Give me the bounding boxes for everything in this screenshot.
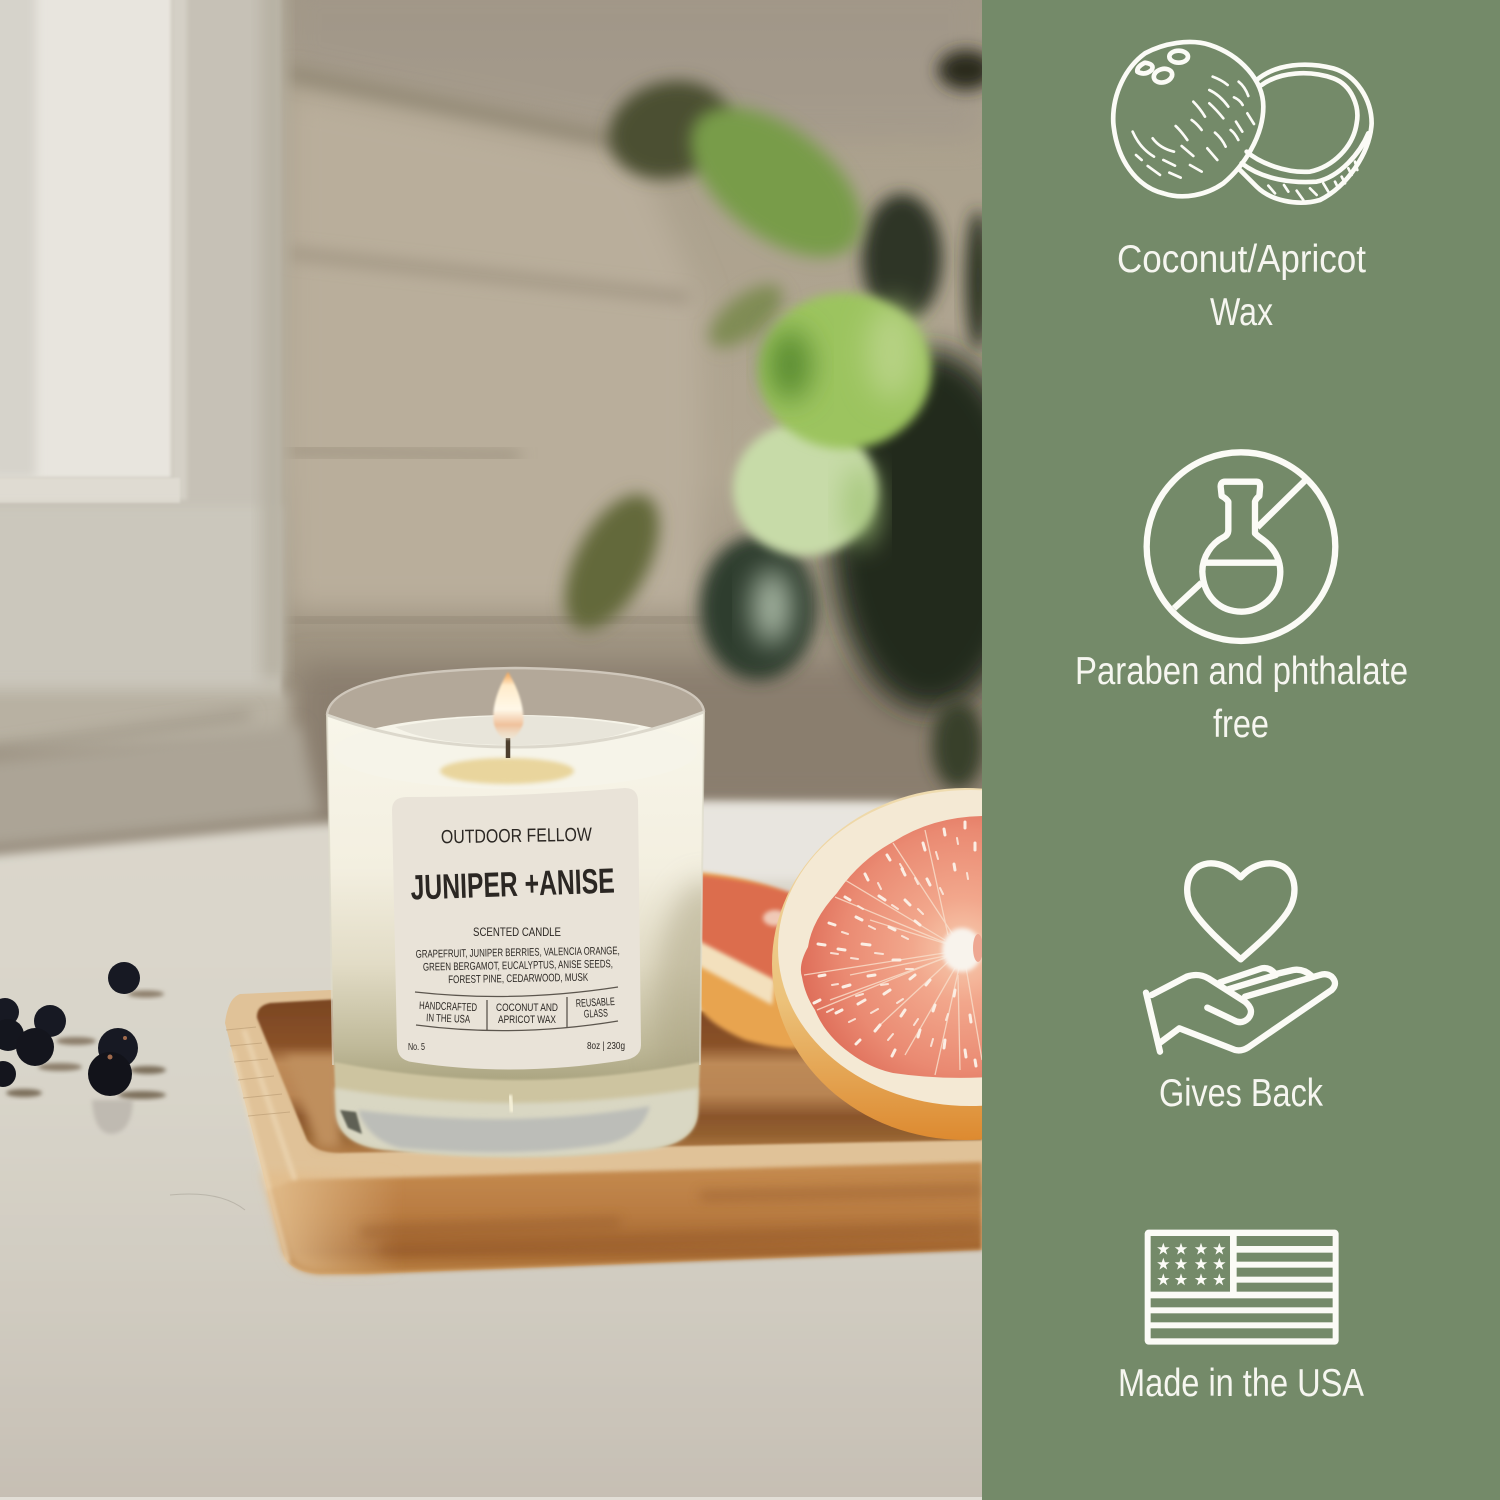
blurred wall background	[0, 0, 982, 860]
wick	[506, 738, 510, 758]
juniper berries	[0, 962, 166, 1099]
text: paraben and phthalate free: free	[1213, 703, 1269, 746]
blurred plant leaves	[545, 50, 1030, 789]
glass base	[334, 1062, 700, 1157]
icon: crossed-out flask	[1147, 452, 1335, 641]
label: table rules	[415, 987, 618, 1031]
back grapefruit half	[697, 872, 800, 1048]
label: attribute text: APRICOT WAX	[498, 1014, 556, 1026]
icon: heart over open hand	[1146, 863, 1335, 1052]
label: attribute text	[420, 998, 615, 1023]
wooden tray	[225, 990, 982, 1276]
label: brand: OUTDOOR FELLOW	[441, 825, 592, 848]
label: number: No. 5	[408, 1041, 425, 1053]
melted wax pool	[440, 758, 574, 784]
flame	[493, 672, 523, 740]
text: gives back: Gives Back	[1159, 1072, 1323, 1115]
glass rim	[327, 668, 704, 1065]
label: attribute text: IN THE USA	[426, 1012, 471, 1026]
text: coconut apricot wax: Wax	[1210, 291, 1273, 334]
panel: product photo	[0, 0, 982, 1500]
candle in glass	[326, 666, 706, 1159]
text: coconut apricot wax	[1117, 238, 1366, 334]
wax surface	[375, 715, 652, 746]
pulp flecks	[814, 822, 976, 1066]
label: attribute text: COCONUT AND	[496, 1002, 558, 1014]
text: made in the usa: Made in the USA	[1118, 1362, 1364, 1405]
label: ingredients	[416, 946, 620, 984]
marble countertop	[0, 803, 1020, 1500]
product label	[392, 788, 641, 1070]
label: attribute text: HANDCRAFTED	[419, 1000, 477, 1014]
label: attribute text: GLASS	[584, 1007, 608, 1021]
label: ingredients: GREEN BERGAMOT, EUCALYPTUS, ANISE SEEDS,	[423, 958, 613, 974]
label: attribute text: REUSABLE	[576, 996, 615, 1010]
pulp membranes	[804, 830, 982, 1075]
label: ingredients: GRAPEFRUIT, JUNIPER BERRIES, VALENCIA ORANGE,	[416, 945, 620, 961]
label: scented candle: SCENTED CANDLE	[473, 925, 561, 939]
label: weight: 8oz | 230g	[587, 1040, 625, 1052]
front grapefruit half	[772, 788, 982, 1140]
label: ingredients: FOREST PINE, CEDARWOOD, MUSK	[448, 972, 589, 986]
text: paraben and phthalate free: Paraben and phthalate	[1075, 650, 1408, 693]
icon: coconut	[1113, 42, 1372, 203]
panel: green feature sidebar	[982, 0, 1500, 1500]
text: coconut apricot wax: Coconut/Apricot	[1117, 238, 1366, 281]
icon: american flag	[1145, 1230, 1339, 1345]
blurred window frame	[0, 0, 320, 850]
text: paraben and phthalate free	[1075, 650, 1408, 746]
label: product name: JUNIPER +ANISE	[410, 861, 615, 908]
